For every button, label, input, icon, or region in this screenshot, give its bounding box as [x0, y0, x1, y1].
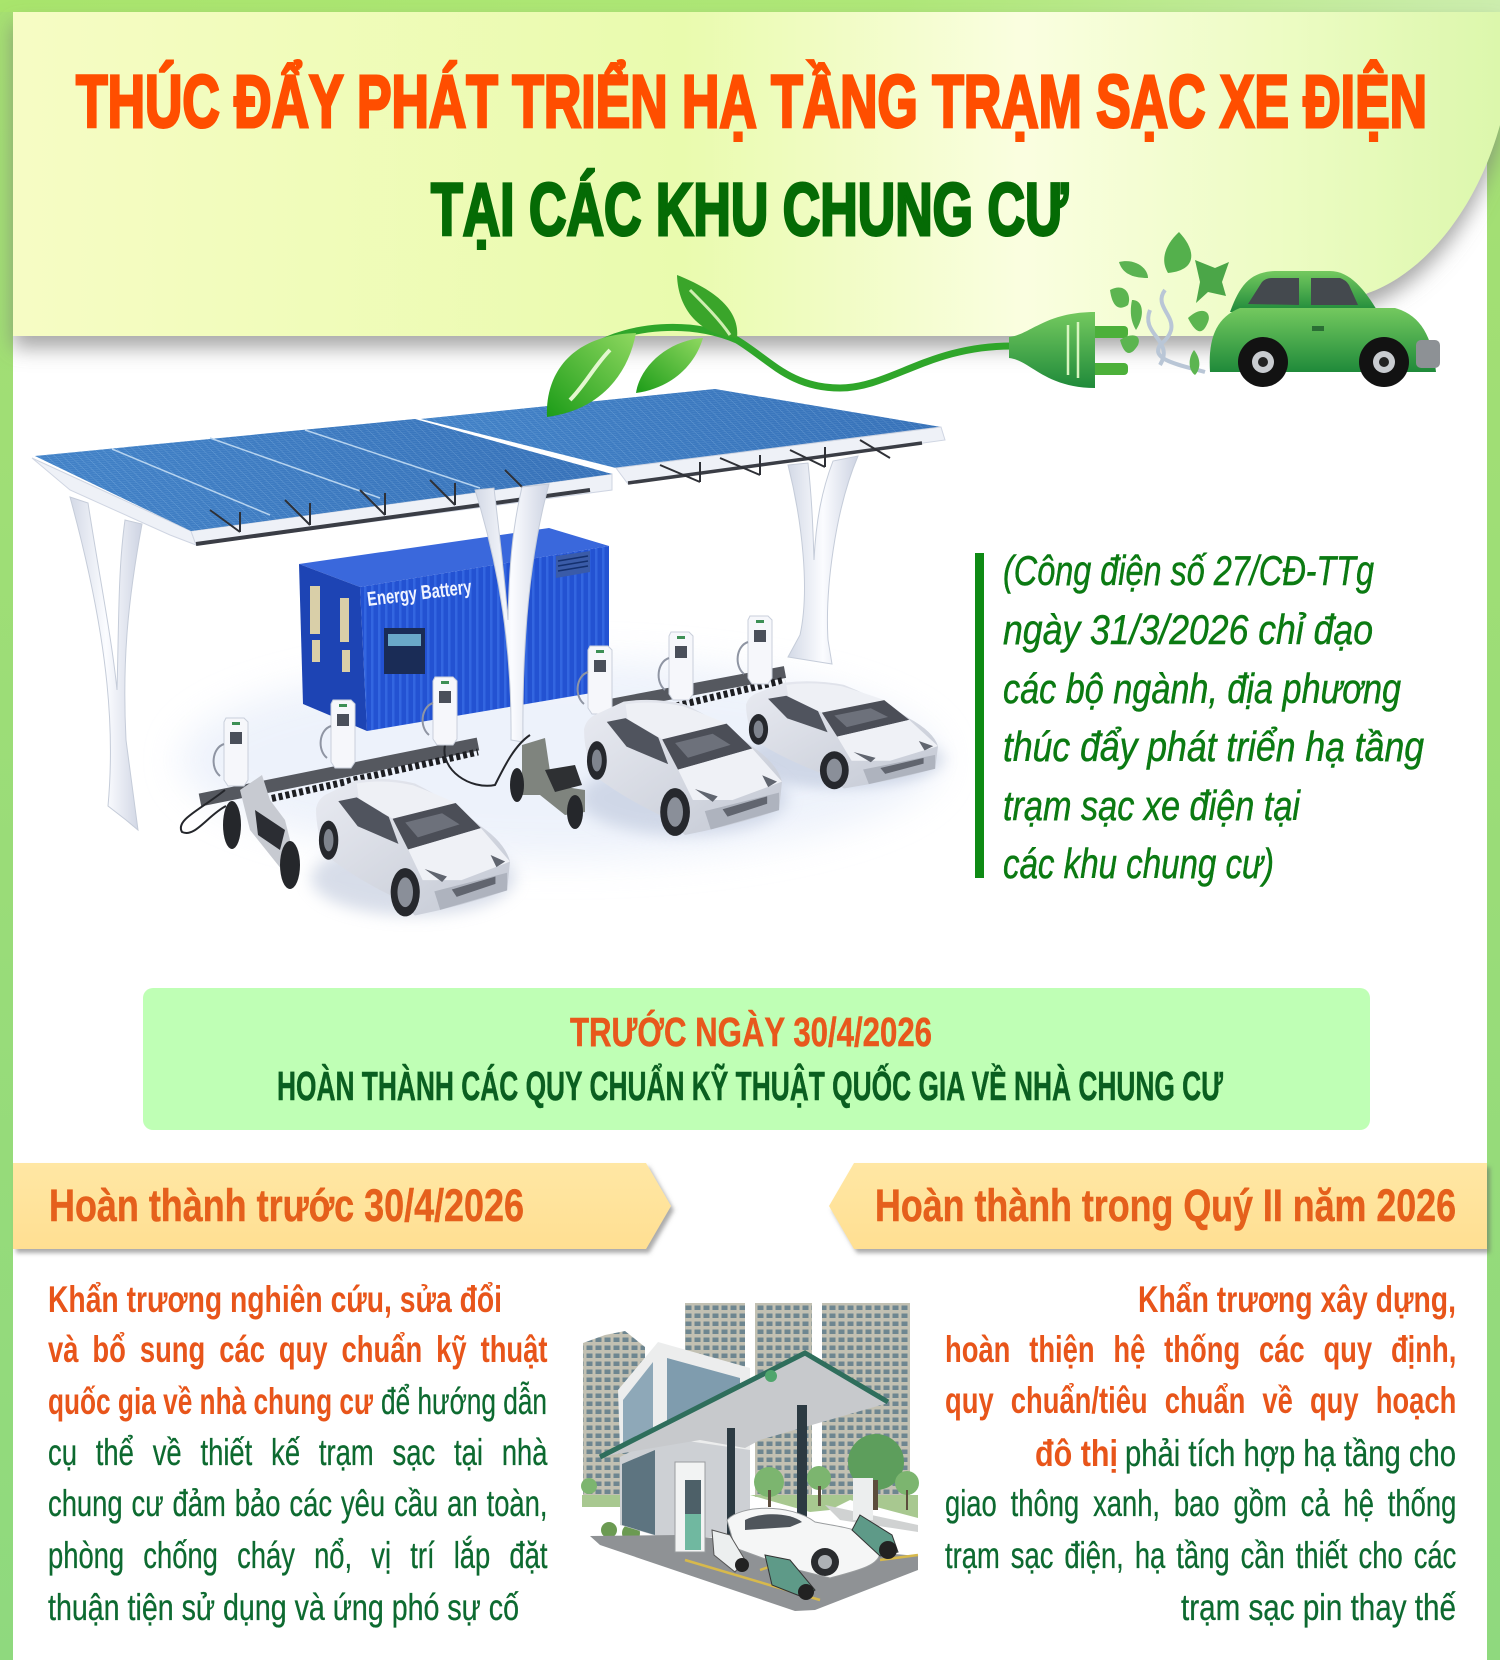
car: SUV [579, 700, 787, 836]
right text block: đô thị [1035, 1433, 1118, 1474]
right text block: quy chuẩn/tiêu chuẩn về quy hoạch [945, 1380, 1456, 1421]
green cable [593, 327, 1014, 388]
right text block: trạm sạc điện, hạ tầng cần thiết cho các [945, 1535, 1456, 1576]
left text block: và bổ sung các quy chuẩn kỹ thuật [48, 1329, 548, 1370]
left text block: phòng chống cháy nổ, vị trí lắp đặt [48, 1535, 548, 1576]
battery container: Energy Battery [366, 576, 473, 611]
exhaust wisps and small leaves [1110, 232, 1229, 375]
forecourt [590, 1535, 918, 1611]
car: rear right [741, 681, 943, 789]
header panel [13, 12, 1500, 336]
car: front [311, 779, 515, 916]
charging posts [214, 616, 772, 786]
right text block [945, 1279, 1456, 1628]
logo: leaves, cable, plug and green car [547, 232, 1440, 417]
citation block: các bộ ngành, địa phương [1003, 665, 1401, 712]
title [76, 60, 1427, 251]
battery container [299, 528, 609, 731]
left text block: quốc gia về nhà chung cư [48, 1381, 373, 1422]
right text block: giao thông xanh, bao gồm cả hệ thống [945, 1483, 1456, 1524]
green car [1210, 271, 1440, 387]
leaves [547, 275, 737, 417]
left ribbon heading: Hoàn thành trước 30/4/2026 [49, 1180, 524, 1231]
right support leg [788, 456, 858, 664]
citation block: các khu chung cư) [1003, 840, 1274, 887]
title: TẠI CÁC KHU CHUNG CƯ [431, 168, 1068, 251]
scooter [510, 738, 585, 829]
left text block: thuận tiện sử dụng và ứng phó sự cố [48, 1587, 519, 1628]
hero illustration: solar canopy charging station [32, 389, 945, 916]
right ribbon heading [829, 1163, 1487, 1249]
charging platforms [200, 672, 785, 800]
apartment charging station illustration [581, 1303, 919, 1611]
plug [1009, 312, 1128, 388]
middle support leg [475, 484, 549, 742]
citation block: ngày 31/3/2026 chỉ đạo [1003, 606, 1373, 653]
left support leg [70, 497, 142, 830]
floor shadow [180, 660, 940, 860]
citation block: thúc đẩy phát triển hạ tầng [1003, 723, 1424, 770]
charging pump [675, 1462, 873, 1552]
canopy roof [600, 1353, 888, 1538]
left text block: để hướng dẫn [381, 1381, 547, 1422]
deadline banner: TRƯỚC NGÀY 30/4/2026 [570, 1009, 932, 1055]
left ribbon heading [13, 1163, 671, 1249]
trees [581, 1434, 919, 1542]
citation block: (Công điện số 27/CĐ-TTg [1003, 547, 1374, 594]
right text block: hoàn thiện hệ thống các quy định, [945, 1329, 1456, 1370]
deadline banner [143, 988, 1370, 1130]
left text block: chung cư đảm bảo các yêu cầu an toàn, [48, 1483, 548, 1524]
motorcycle [181, 775, 300, 889]
parked scooters [712, 1515, 898, 1600]
lawn and road [582, 1495, 918, 1532]
citation block: trạm sạc xe điện tại [1003, 782, 1301, 829]
office building [618, 1342, 750, 1537]
white electric car [727, 1508, 880, 1578]
left text block: cụ thể về thiết kế trạm sạc tại nhà [48, 1432, 548, 1473]
citation block [975, 547, 1424, 887]
solar roof [32, 389, 945, 545]
apartment towers [583, 1303, 910, 1507]
left text block: Khẩn trương nghiên cứu, sửa đổi [48, 1279, 502, 1320]
left text block [48, 1279, 548, 1628]
